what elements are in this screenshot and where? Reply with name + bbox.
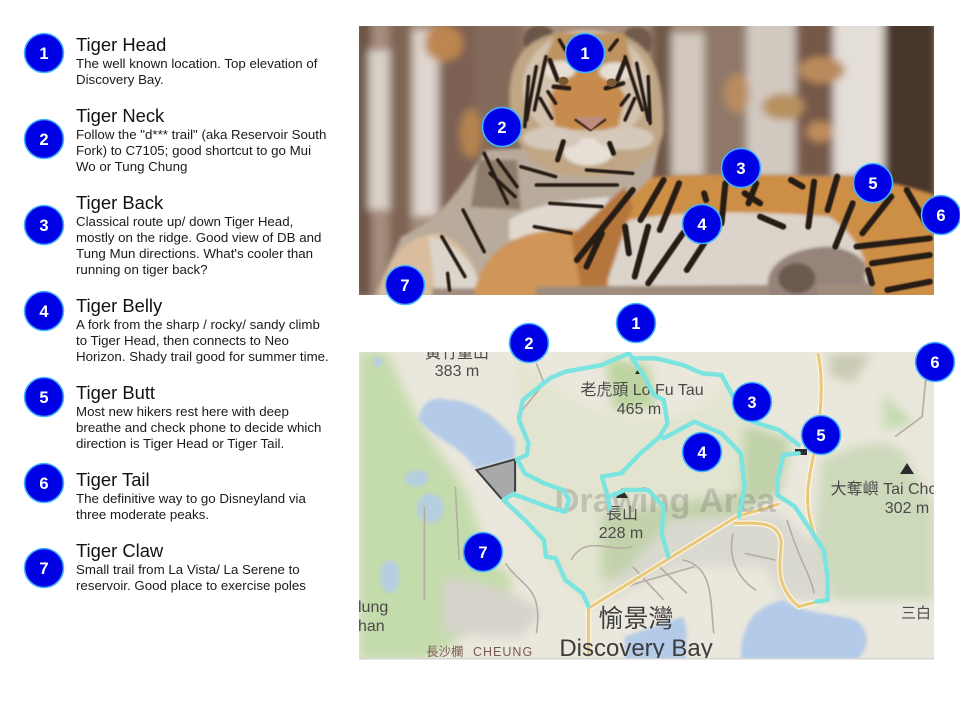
body stripes bbox=[577, 177, 930, 290]
legend item 2: Tiger Neck bbox=[24, 105, 326, 174]
legend item 3: Tiger Back: 3 bbox=[39, 217, 49, 235]
map labels: 大奪嶼 Tai Cho bbox=[831, 480, 937, 498]
legend item 3: Tiger Back: Classical route up/ down Tiger Head, bbox=[76, 214, 293, 229]
legend item 4: Tiger Belly: Tiger Belly bbox=[76, 295, 163, 316]
legend item 1: Tiger Head: Discovery Bay. bbox=[76, 72, 164, 87]
nose bbox=[575, 117, 606, 130]
legend item 6: Tiger Tail: three moderate peaks. bbox=[76, 507, 209, 522]
legend item 1: Tiger Head: The well known location. Top elevation of bbox=[76, 56, 318, 71]
legend item 4: Tiger Belly bbox=[24, 292, 329, 364]
map labels: 愉景灣 bbox=[598, 605, 674, 633]
mane bbox=[509, 30, 664, 177]
map labels: han bbox=[358, 618, 385, 635]
legend item 2: Tiger Neck: 2 bbox=[39, 131, 49, 149]
legend item 5: Tiger Butt: breathe and check phone to decide which bbox=[76, 420, 321, 435]
legend item 6: Tiger Tail: Tiger Tail bbox=[76, 469, 150, 490]
panel: trail legend bbox=[24, 34, 329, 593]
map labels: 長沙欄 bbox=[426, 644, 464, 659]
map markers: 3 bbox=[747, 394, 757, 412]
photo markers: 6 bbox=[936, 207, 946, 225]
legend item 4: Tiger Belly: A fork from the sharp / rocky/ sandy climb bbox=[76, 317, 320, 332]
legend item 3: Tiger Back: Tiger Back bbox=[76, 192, 164, 213]
map bottom edge bbox=[359, 658, 934, 660]
map markers: 5 bbox=[816, 427, 826, 445]
legend item 7: Tiger Claw: Tiger Claw bbox=[76, 540, 164, 561]
legend item 4: Tiger Belly: Horizon. Shady trail good for summer time. bbox=[76, 349, 329, 364]
legend item 7: Tiger Claw bbox=[24, 540, 306, 593]
legend item 2: Tiger Neck: Fork) to C7105; good shortcut to go Mui bbox=[76, 143, 311, 158]
paw pad bbox=[778, 263, 815, 293]
hiking trails bbox=[504, 353, 828, 606]
map terrain and water bbox=[359, 352, 934, 660]
map labels: 長山 bbox=[606, 505, 638, 523]
map markers: 6 bbox=[930, 354, 940, 372]
legend item 5: Tiger Butt: 5 bbox=[39, 389, 49, 407]
map labels: 302 m bbox=[885, 500, 929, 517]
legend item 3: Tiger Back: running on tiger back? bbox=[76, 262, 208, 277]
legend item 2: Tiger Neck: Wo or Tung Chung bbox=[76, 159, 187, 174]
legend item 5: Tiger Butt bbox=[24, 378, 321, 451]
map markers: 4 bbox=[697, 444, 707, 462]
photo markers: 2 bbox=[497, 119, 507, 137]
legend item 3: Tiger Back bbox=[24, 192, 321, 277]
legend item 1: Tiger Head: Tiger Head bbox=[76, 34, 166, 55]
ground bbox=[432, 283, 874, 297]
water bbox=[419, 399, 515, 468]
legend item 6: Tiger Tail: The definitive way to go Disneyland via bbox=[76, 491, 306, 506]
map labels: 465 m bbox=[617, 401, 661, 418]
chest and shoulders bbox=[374, 143, 660, 297]
legend item 3: Tiger Back: Tung Mun directions. What's cooler than bbox=[76, 246, 313, 261]
forest background bbox=[355, 20, 936, 297]
legend item 6: Tiger Tail bbox=[24, 464, 306, 522]
photo markers: 3 bbox=[736, 160, 746, 178]
photo markers: 5 bbox=[868, 175, 878, 193]
tiger bbox=[374, 25, 938, 297]
map labels: 黃竹重山 bbox=[425, 344, 489, 362]
watermark: Drawing Area: Drawing Area bbox=[554, 482, 776, 520]
legend item 2: Tiger Neck: Follow the "d*** trail" (aka Reservoir South bbox=[76, 127, 326, 142]
map labels: CHEUNG bbox=[473, 645, 533, 659]
legend item 5: Tiger Butt: Tiger Butt bbox=[76, 382, 155, 403]
white belly bbox=[604, 210, 870, 288]
legend item 5: Tiger Butt: Most new hikers rest here with deep bbox=[76, 404, 289, 419]
legend item 7: Tiger Claw: Small trail from La Vista/ La Serene to bbox=[76, 562, 300, 577]
peak icons bbox=[616, 366, 914, 498]
map labels: 三白 bbox=[901, 605, 931, 622]
legend item 4: Tiger Belly: to Tiger Head, then connects to Neo bbox=[76, 333, 289, 348]
map labels bbox=[358, 344, 937, 662]
map labels: Discovery Bay bbox=[559, 635, 713, 662]
legend item 7: Tiger Claw: reservoir. Good place to exercise poles bbox=[76, 578, 306, 593]
map markers: 2 bbox=[524, 335, 534, 353]
legend item 4: Tiger Belly: 4 bbox=[39, 303, 49, 321]
head bbox=[523, 30, 650, 143]
panel: trail map bbox=[358, 344, 937, 662]
map labels: 老虎頭 Lo Fu Tau bbox=[580, 381, 704, 399]
legend item 7: Tiger Claw: 7 bbox=[39, 560, 49, 578]
legend item 5: Tiger Butt: direction is Tiger Head or Tiger Tail. bbox=[76, 436, 284, 451]
face stripes bbox=[525, 40, 650, 127]
photo markers bbox=[386, 34, 960, 304]
photo markers: 4 bbox=[697, 216, 707, 234]
right foreleg bbox=[473, 229, 610, 297]
legend item 1: Tiger Head: 1 bbox=[39, 45, 49, 63]
legend item 1: Tiger Head bbox=[24, 34, 318, 87]
legend item 3: Tiger Back: mostly on the ridge. Good view of DB and bbox=[76, 230, 321, 245]
map markers: 1 bbox=[631, 315, 641, 333]
map markers bbox=[464, 304, 954, 572]
hind paw bbox=[768, 247, 872, 297]
back and hind leg bbox=[571, 175, 938, 297]
map labels: 383 m bbox=[435, 363, 479, 380]
map markers: 7 bbox=[478, 544, 488, 562]
map labels: lung bbox=[358, 599, 388, 616]
roads bbox=[424, 353, 926, 657]
legend item 2: Tiger Neck: Tiger Neck bbox=[76, 105, 165, 126]
drawn polygon bbox=[477, 459, 515, 499]
left foreleg bbox=[378, 233, 482, 297]
map labels: 228 m bbox=[599, 525, 643, 542]
panel: tiger photo bbox=[355, 20, 938, 297]
ears bbox=[522, 26, 554, 48]
photo markers: 7 bbox=[400, 277, 410, 295]
legend item 6: Tiger Tail: 6 bbox=[39, 475, 49, 493]
photo markers: 1 bbox=[580, 45, 590, 63]
